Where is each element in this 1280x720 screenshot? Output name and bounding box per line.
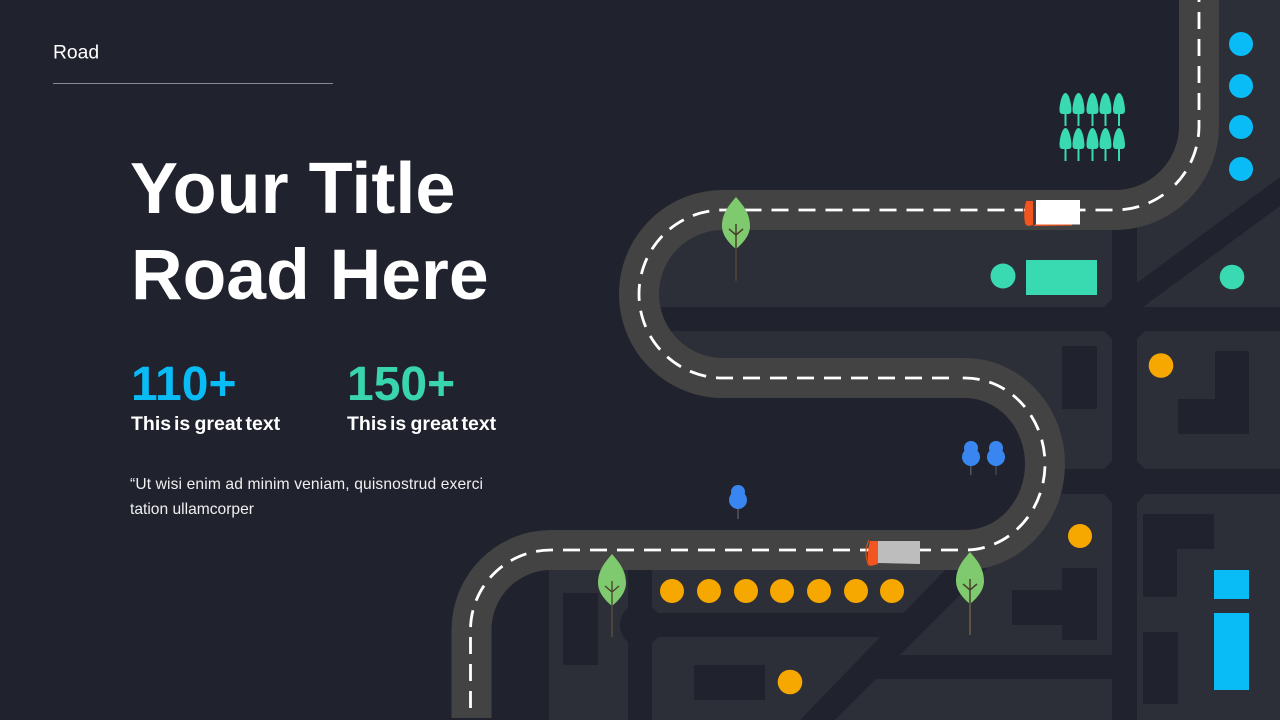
stat: 110+: text [246, 413, 281, 435]
cyan buildings [1214, 570, 1249, 690]
stat: 110+: 110+ [131, 358, 236, 411]
orange dots row [660, 579, 904, 603]
section label: Road [53, 42, 99, 64]
title [130, 149, 489, 315]
stat: 150+ [347, 358, 497, 435]
blue tree single [729, 485, 747, 519]
dark buildings [563, 346, 1249, 704]
quote text: “Ut wisi enim ad minim veniam, quisnostrud exerci [130, 476, 483, 493]
tree: leaf lower left [598, 554, 626, 637]
quote text: tation ullamcorper [130, 501, 254, 518]
city map [549, 0, 1280, 720]
city blocks [549, 0, 1280, 720]
stat: 110+ [131, 358, 281, 435]
cyan dots [1229, 32, 1253, 181]
title: Your Title [130, 149, 455, 229]
road centre dashes [470, 0, 1199, 708]
title: Road Here [131, 235, 489, 315]
truck: grey [866, 540, 920, 566]
green tree cluster [1060, 93, 1125, 161]
truck: white [1023, 200, 1080, 226]
stat: 150+: This [347, 413, 387, 435]
stat: 110+: is [174, 413, 190, 435]
tree: leaf lower right [956, 552, 984, 635]
tree: leaf upper [722, 197, 750, 281]
stat: 150+: text [462, 413, 497, 435]
quote text [130, 476, 483, 518]
stat: 110+: great [194, 413, 243, 435]
stat: 110+: This [131, 413, 171, 435]
winding road [472, 0, 1199, 718]
orange dots scattered [778, 353, 1173, 694]
stat: 150+: is [390, 413, 406, 435]
street network [620, 177, 1280, 720]
blue trees pair [962, 441, 1005, 475]
stat: 150+: great [410, 413, 459, 435]
green building and dots [990, 260, 1244, 295]
stat: 150+: 150+ [347, 358, 455, 411]
